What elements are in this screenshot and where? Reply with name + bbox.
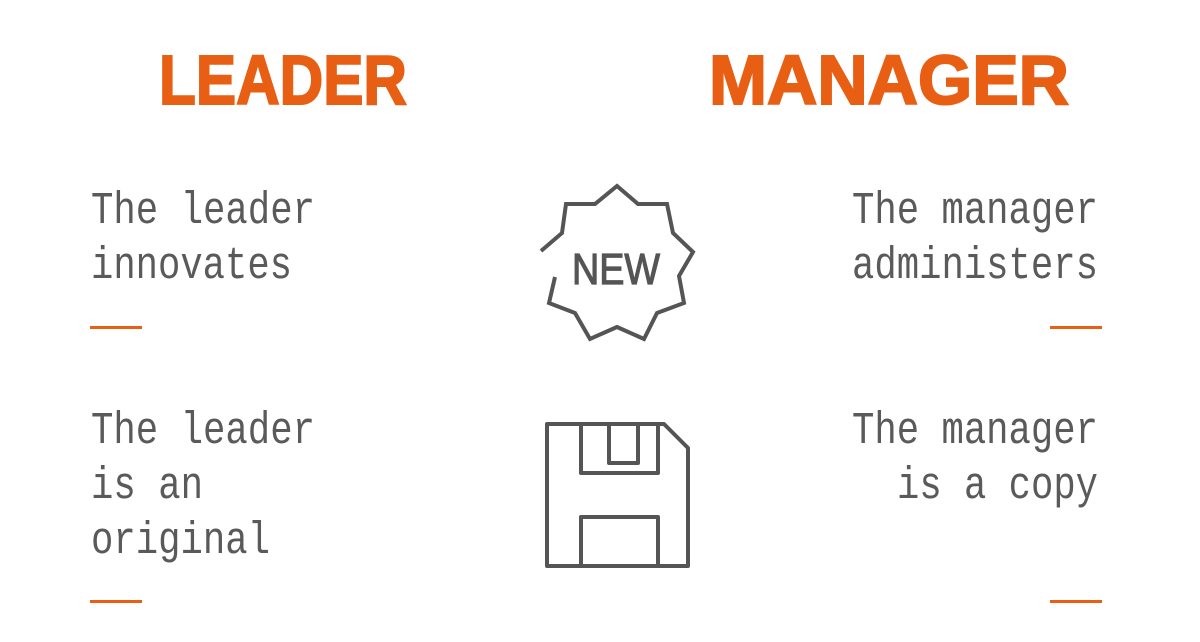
text: leader innovates: innovates	[91, 241, 292, 292]
text: leader original	[90, 406, 315, 603]
title: manager: MANAGER	[709, 41, 1069, 119]
text: manager administers: administers	[852, 241, 1098, 292]
text: leader original: original	[91, 516, 270, 567]
icon: new badge: NEW	[572, 245, 660, 294]
text: leader innovates	[90, 186, 315, 329]
text: manager administers	[852, 186, 1102, 329]
icon: new badge	[541, 186, 693, 339]
text: manager administers: The manager	[852, 186, 1098, 237]
text: manager copy	[852, 406, 1102, 603]
title: leader: LEADER	[159, 41, 407, 119]
text: leader innovates: The leader	[91, 186, 315, 237]
icon: floppy disk	[547, 424, 688, 566]
text: manager copy: is a copy	[897, 461, 1098, 512]
text: manager copy: The manager	[852, 406, 1098, 457]
text: leader original: The leader	[91, 406, 315, 457]
text: leader original: is an	[91, 461, 203, 512]
